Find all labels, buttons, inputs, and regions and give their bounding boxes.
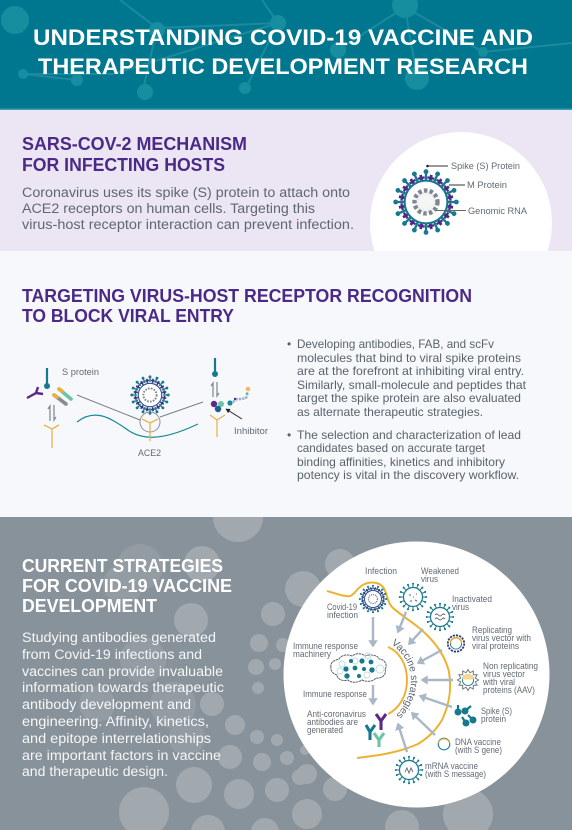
- text block: bullets: The selection and characterization of lead: [297, 428, 521, 442]
- icon: S protein: [44, 368, 50, 389]
- icon: ACE2 receptor right: [210, 415, 225, 437]
- labels: virus parts: [426, 161, 528, 216]
- text block: bullets: candidates based on accurate target: [297, 441, 486, 455]
- arrow: inhibitor pointer: [226, 409, 242, 419]
- labels: strategies: (with S message): [425, 769, 486, 779]
- labels: strategies: Replicating: [472, 625, 512, 635]
- text block: bullets: •: [287, 337, 291, 351]
- labels: strategies: Infection: [365, 566, 397, 576]
- text block: mechanism description: Coronavirus uses its spike (S) protein to attach onto: [22, 185, 350, 200]
- labels: strategies: with viral: [482, 677, 515, 687]
- icon: virus on ACE2: [124, 369, 176, 421]
- title: THERAPEUTIC DEVELOPMENT RESEARCH: [38, 54, 528, 79]
- panel: targeting virus-host recognition: [0, 251, 572, 517]
- text block: mechanism description: ACE2 receptors on human cells. Targeting this: [22, 201, 315, 216]
- heading: targeting: [22, 285, 472, 326]
- labels: strategies: Anti-coronavirus: [307, 709, 366, 719]
- text block: bullets: as alternate therapeutic strategies.: [297, 405, 483, 419]
- labels: strategies: generated: [307, 725, 343, 735]
- icon: equilibrium arrows left: [48, 405, 56, 421]
- labels: diagram: S protein: [62, 367, 99, 377]
- icon: replicating virus vector: [448, 635, 464, 652]
- labels: diagram: [62, 367, 268, 458]
- labels: strategies: Inactivated: [452, 594, 492, 604]
- icon: mRNA vaccine: [390, 751, 428, 789]
- icon: ACE2 receptor centre: [142, 419, 158, 441]
- labels: strategies: DNA vaccine: [455, 737, 501, 747]
- labels: strategies: Covid-19: [327, 602, 357, 612]
- text block: bullets: are at the forefront at inhibiting viral entry.: [297, 364, 524, 378]
- labels: strategies: proteins (AAV): [483, 685, 535, 695]
- title: [33, 25, 533, 79]
- text block: strategies description: and therapeutic design.: [22, 764, 168, 779]
- labels: virus parts: M Protein: [467, 180, 507, 190]
- labels: virus parts: Genomic RNA: [468, 206, 528, 216]
- labels: strategies: Non replicating: [483, 661, 538, 671]
- icon: immune cloud: [331, 653, 386, 682]
- text block: strategies description: are important factors in vaccine: [22, 748, 221, 763]
- heading: mechanism: SARS-COV-2 MECHANISM: [22, 133, 247, 154]
- labels: strategies: Spike (S): [481, 706, 512, 716]
- header band: [0, 0, 572, 110]
- text block: strategies description: and epitope interrelationships: [22, 731, 211, 746]
- labels: strategies: [293, 566, 538, 779]
- heading: targeting: TARGETING VIRUS-HOST RECEPTOR RECOGNITION: [22, 285, 472, 306]
- labels: strategies: (with S gene): [455, 745, 502, 755]
- text block: strategies description: [22, 630, 224, 779]
- icon: DNA vaccine: [438, 738, 450, 750]
- labels: strategies: viral proteins: [472, 641, 519, 651]
- diagram: receptor recognition: [27, 358, 268, 458]
- labels: strategies: virus vector: [483, 669, 525, 679]
- curved label: Vaccine strategies: [394, 638, 418, 718]
- text block: strategies description: vaccines can provide invaluable: [22, 664, 223, 679]
- icon: inactivated virus: [421, 598, 459, 636]
- icon: spike proteins: [456, 705, 475, 725]
- text block: strategies description: engineering. Affinity, kinetics,: [22, 714, 209, 729]
- text block: bullets: target the spike protein are also evaluated: [297, 391, 521, 405]
- labels: diagram: ACE2: [138, 448, 161, 458]
- text block: bullets: binding affinities, kinetics and inhibitory: [297, 455, 505, 469]
- text block: strategies description: from Covid-19 infections and: [22, 647, 202, 662]
- labels: strategies: virus vector with: [472, 633, 531, 643]
- text block: mechanism description: [22, 185, 354, 232]
- diagram: vaccine strategies: [284, 542, 550, 808]
- heading: strategies: CURRENT STRATEGIES: [22, 555, 223, 576]
- heading: mechanism: [22, 133, 247, 175]
- text block: bullets: Similarly, small-molecule and peptides that: [297, 378, 527, 392]
- labels: diagram: Inhibitor: [234, 426, 268, 436]
- icon: coronavirus: [383, 159, 469, 245]
- text block: bullets: •: [287, 428, 291, 442]
- text block: strategies description: Studying antibodies generated: [22, 630, 216, 645]
- icon: Fab fragments: [54, 389, 71, 404]
- labels: virus parts: Spike (S) Protein: [451, 161, 520, 171]
- labels: strategies: Immune response: [293, 641, 358, 651]
- labels: strategies: Weakened: [421, 566, 459, 576]
- icon: antibody: [27, 387, 43, 398]
- heading: strategies: [22, 555, 232, 616]
- text block: bullets: molecules that bind to viral spike proteins: [297, 351, 521, 365]
- labels: strategies: Immune response: [303, 689, 367, 699]
- labels: strategies: antibodies are: [307, 717, 358, 727]
- labels: strategies: mRNA vaccine: [425, 761, 478, 771]
- icon: spike right: [212, 358, 218, 377]
- icon: equilibrium arrows right: [211, 382, 219, 397]
- text block: strategies description: information towards therapeutic: [22, 680, 224, 695]
- labels: strategies: virus: [452, 602, 469, 612]
- labels: strategies: virus: [421, 574, 438, 584]
- labels: strategies: protein: [481, 714, 506, 724]
- heading: targeting: TO BLOCK VIRAL ENTRY: [22, 305, 235, 326]
- arrows: [373, 612, 453, 752]
- icon: weakened virus: [394, 578, 432, 616]
- icon: antibodies: [366, 714, 386, 747]
- text block: mechanism description: virus-host receptor interaction can prevent infection.: [22, 217, 354, 232]
- panel: SARS-CoV-2 mechanism: [0, 110, 572, 251]
- text block: strategies description: antibody development and: [22, 697, 191, 712]
- text block: bullets: Developing antibodies, FAB, and scFv: [297, 337, 494, 351]
- white circle backdrop: [370, 132, 552, 251]
- icon: non replicating vector: [458, 670, 478, 690]
- heading: strategies: FOR COVID-19 VACCINE: [22, 575, 232, 596]
- icon: inhibitor cluster: [211, 387, 250, 412]
- heading: strategies: DEVELOPMENT: [22, 595, 158, 616]
- labels: strategies: infection: [327, 610, 358, 620]
- text block: bullets: [287, 337, 527, 482]
- icon: covid virus: [354, 580, 392, 618]
- heading: mechanism: FOR INFECTING HOSTS: [22, 154, 225, 175]
- text block: bullets: potency is vital in the discovery workflow.: [297, 468, 519, 482]
- title: UNDERSTANDING COVID-19 VACCINE AND: [33, 25, 533, 50]
- panel: current strategies: [0, 517, 572, 830]
- labels: strategies: machinery: [293, 649, 331, 659]
- icon: ACE2 receptor left: [44, 425, 59, 448]
